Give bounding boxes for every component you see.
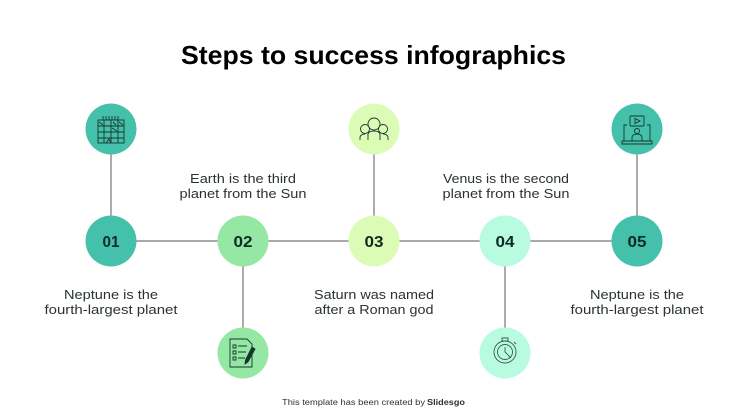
icon: laptop with video	[612, 104, 662, 154]
step 02 node	[218, 216, 268, 266]
text: step 02 caption: Earth is the third	[190, 171, 296, 186]
text: step 03 caption: after a Roman god	[314, 302, 434, 317]
title: Steps to success infographics	[181, 40, 566, 70]
step 05 node	[612, 216, 662, 266]
text: step 03 caption	[314, 287, 434, 317]
text: step 05 caption	[570, 287, 704, 317]
text: step 04 caption: Venus is the second	[443, 171, 569, 186]
text: step 01 caption: Neptune is the	[64, 287, 158, 302]
icon: group of people	[348, 104, 400, 154]
step 03 node: 03	[364, 234, 384, 251]
text: step 04 caption: planet from the Sun	[442, 186, 570, 201]
text: step 02 caption: planet from the Sun	[180, 186, 306, 201]
step 05 node: 05	[628, 234, 647, 251]
text: step 05 caption: fourth-largest planet	[570, 302, 704, 317]
step 03 node	[348, 216, 400, 266]
step 04 node	[480, 216, 530, 266]
connector lines	[111, 129, 637, 353]
step 01 node	[86, 216, 136, 266]
icon: checklist with pen	[218, 328, 268, 378]
footer credit	[282, 398, 465, 407]
step 01 node: 01	[102, 234, 120, 251]
step 04 node: 04	[496, 234, 515, 251]
text: step 04 caption	[442, 171, 570, 201]
text: step 01 caption	[44, 287, 178, 317]
footer credit: Slidesgo	[427, 398, 465, 407]
footer credit: This template has been created by	[282, 398, 425, 407]
text: step 01 caption: fourth-largest planet	[44, 302, 178, 317]
icon: calendar	[86, 104, 136, 154]
step 02 node: 02	[234, 234, 252, 251]
text: step 02 caption	[180, 171, 306, 201]
text: step 03 caption: Saturn was named	[314, 287, 434, 302]
text: step 05 caption: Neptune is the	[590, 287, 684, 302]
icon: stopwatch	[480, 328, 530, 378]
